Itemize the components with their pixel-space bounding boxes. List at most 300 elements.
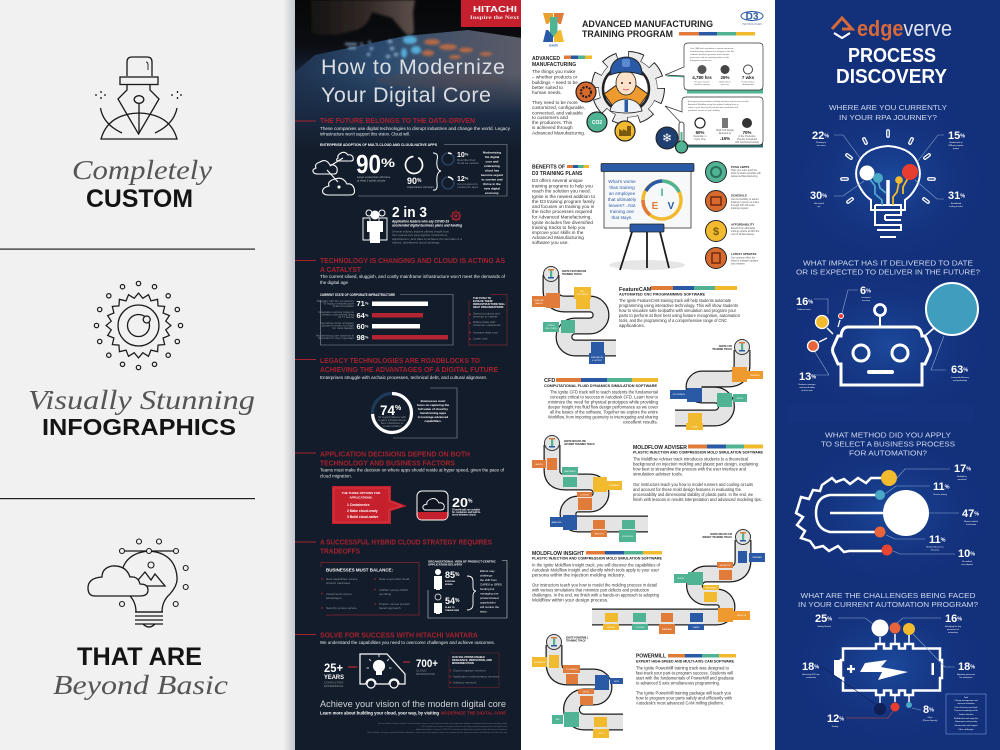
callout: molding results: Reduction in: [694, 135, 707, 138]
text: modernizing note: core and: [486, 160, 499, 164]
stat: 13 percent: to drive work: [801, 389, 813, 392]
text: cfd: The Ignite CFD track will to teach students the fundamental: [550, 390, 658, 394]
stat: 47 percent: %: [974, 512, 979, 518]
section: application decisions: [295, 450, 505, 478]
stat: 20 percent with cloud icon: [417, 491, 481, 520]
list: benefit badges: [706, 162, 761, 268]
stat: 20 percent with cloud icon: 20: [452, 495, 468, 510]
text: modernizing note: Modernizing: [483, 150, 501, 154]
track: moldflow insight: PREPARE: [752, 556, 762, 559]
callout: pressure to evolve: THE PUSH TO: [473, 296, 491, 300]
icon: virus: [450, 210, 462, 222]
text: board quote: that ultimately: [608, 197, 637, 202]
section: technology changing: the digital age: [320, 280, 348, 285]
question: challenges: [798, 591, 978, 609]
stat: 18 percent left: Achieving ROI from: [802, 673, 820, 676]
text: board quote: [608, 179, 637, 220]
icon: clouds: [313, 152, 354, 195]
item: schedule: training program: [731, 207, 748, 210]
icon: engineer figure: [604, 57, 648, 113]
stat: 15 percent: 15: [948, 130, 960, 142]
track: cfd: IGNITE CFD: [719, 346, 732, 348]
section: application decisions: cloud migration.: [320, 474, 352, 478]
text: moldflow insight: PLASTIC INJECTION AND COMPRESSION MOLD SIMULATION SOFTWARE: [532, 556, 663, 560]
item: push limits: limits of what's possible with: [731, 172, 761, 175]
stat: 2 in 3: [363, 204, 462, 244]
track: powermill: AXIS: [614, 680, 619, 683]
stat: 11 percent: Process mining: [933, 494, 947, 496]
callout: pressure to evolve: Increase data trust: [473, 330, 498, 334]
stat: 16 percent: 16: [796, 296, 808, 308]
footnotes: Hitachi Vantara, all rights reserved. All other trademarks, service marks and company names are properties of their respective owners and used here for reference only: [367, 731, 507, 734]
stat: 30 percent: Not started: [814, 202, 824, 205]
track: moldflow insight: INSIGHT TRAINING TRACK: [702, 536, 732, 539]
logo: ignite: IGNITE: [549, 44, 558, 48]
text: benefits of d3 training plans: training programs to help you: [532, 184, 593, 188]
stat: 16 percent: Identifying the key: [945, 625, 961, 628]
text: benefits of d3 training plans: and focuses on training you in: [532, 204, 595, 209]
donut chart: 74 percent: %: [395, 405, 402, 412]
track: powermill: INTERFACE: [534, 661, 546, 664]
track: moldflow insight: COOLING: [635, 627, 645, 629]
callout: software benefits: manufacturing software for designers that lets: [690, 50, 735, 53]
bar chart: corporate infrastructure: limits innovation: [333, 304, 354, 308]
chart box: enterprise adoption: [313, 143, 507, 196]
section: application decisions: TECHNOLOGY AND BUSINESS FACTORS: [320, 458, 455, 468]
stat: 20 percent with cloud icon: Of workloads are suitable: [452, 508, 481, 512]
stats: 10 and 12 percent: 10: [457, 152, 465, 159]
logo: d3 technologies: TECHNOLOGIES: [742, 23, 762, 26]
text: featurecam: The Ignite FeatureCAM training track will help students automate: [619, 298, 731, 303]
callout: molding results: of the Production: [738, 135, 756, 138]
stat: 63 percent: [951, 364, 969, 382]
panel: product-centric delivery: PLAN TO: [445, 606, 455, 609]
callout: pressure to evolve: EVOLVE THEIR: [473, 299, 493, 303]
stat: 31 percent: %: [960, 194, 965, 200]
leader lines: [818, 618, 955, 718]
track: powermill: TRAINING TRACK: [566, 640, 586, 642]
donut chart: 74 percent: capabilities.: [424, 419, 442, 423]
stat: 25 percent: Getting Started: [817, 625, 831, 628]
panel: businesses must balance: advantages: [326, 596, 342, 600]
section: solve for success: [295, 630, 495, 645]
stat: 11 percent automated: Automated process: [926, 546, 944, 548]
leader lines: [811, 290, 946, 375]
text: moldflow adviser: MOLDFLOW ADVISER: [633, 445, 687, 451]
track: moldflow insight: MODEL: [677, 578, 685, 580]
track: moldflow insight: WARPAGE: [662, 628, 673, 631]
stat: 2 in 3: their experiences tying together infrastructure,: [392, 233, 448, 237]
heading: visually stunning infographics: Visually Stunning: [28, 385, 255, 415]
bar chart: corporate infrastructure: for most leaders: [332, 326, 354, 330]
donut chart: 74 percent: Of organizations with: [378, 415, 406, 419]
callout: pressure to evolve: customer experience: [473, 323, 501, 327]
footnotes: [367, 722, 507, 734]
icon: yellow factory badge: [615, 121, 635, 141]
text: cfd: COMPUTATIONAL FLUID DYNAMICS SIMULATION SOFTWARE: [544, 384, 658, 388]
callout: molding results: 60%: [696, 130, 704, 135]
stat: 90 percent: 90: [356, 149, 381, 179]
stat: 25 percent: 25: [815, 613, 827, 625]
callout: software benefits: Make-time in: [719, 80, 731, 84]
track: moldflow insight: IGNITE MOLDFLOW: [710, 534, 733, 536]
stat: 16 percent: automation: [948, 631, 958, 634]
text: advanced manufacturing intro: Advanced Manufacturing.: [532, 130, 585, 136]
track: cfd: TRAINING TRACK: [712, 348, 732, 351]
text: moldflow adviser: and account for these mold design features in evaluating the: [633, 487, 741, 492]
panel: hitachi digital core: [295, 0, 522, 750]
closing statement: Learn more about building your cloud, your way, by visiting: [320, 710, 439, 716]
callout: three options: 2 Make cloud-ready: [347, 509, 378, 513]
callout: software benefits: Faster product: [742, 80, 755, 84]
panel: product-centric delivery: funding but: [480, 587, 495, 591]
text: moldflow adviser: finish with lessons in results interpretation and advanced modeling tips.: [633, 497, 762, 502]
stat: 2 in 3: accelerated digital business plans and funding: [392, 224, 462, 228]
callout: pressure to evolve: HELP ORGANIZATIONS:: [473, 305, 504, 309]
track: powermill: [532, 634, 623, 738]
stat: 31 percent: [948, 190, 965, 208]
panel: businesses must balance: Project- versus product: [379, 602, 410, 606]
callout: molding results: 70%: [743, 130, 751, 135]
track: moldflow insight: DESIGN: [607, 627, 615, 629]
donut chart: 74 percent: full value of cloud by: [418, 407, 448, 411]
text: powermill: The Ignite PowerMill training package will teach you: [636, 690, 731, 696]
heading: that are beyond basic: Beyond Basic: [53, 670, 228, 700]
text: advanced manufacturing intro: MANUFACTURING: [532, 62, 576, 68]
panel: product-centric delivery: MODEL: [445, 584, 454, 586]
text: featurecam: [619, 286, 740, 328]
text: moldflow insight: MOLDFLOW INSIGHT: [532, 551, 585, 557]
stat: 90 percent: %: [381, 156, 395, 170]
section: legacy technologies: Enterprises struggle with archaic processes, technical debt, and cultural alignment.: [320, 375, 487, 380]
track: moldflow adviser: BASICS: [535, 463, 543, 466]
bar chart: corporate infrastructure: of legacy infrastructure: [324, 302, 354, 306]
stats: 10 and 12 percent: Describe their: [457, 158, 476, 162]
text: board quote: an employee: [609, 191, 636, 196]
stat: 22 percent: %: [824, 134, 829, 140]
text: powermill: fast-track your part-to-program success. Students will: [636, 670, 733, 676]
text: modernizing note: embracing: [484, 164, 500, 168]
stat: 16 percent: [945, 613, 962, 634]
text: featurecam: AUTOMATED CNC PROGRAMMING SOFTWARE: [619, 292, 706, 296]
stat: 6 percent: 6: [860, 285, 866, 297]
note box: Skilled talent and expertise: [954, 717, 979, 720]
stat: 47 percent: Manual method: [964, 520, 978, 523]
section: hybrid cloud strategy: TRADEOFFS: [320, 546, 360, 556]
stat: 22 percent: [812, 130, 829, 147]
panel: product-centric delivery: ORGANIZATIONAL VIEW OF PRODUCT-CENTRIC: [428, 560, 497, 564]
donut: 90 percent: [402, 153, 434, 189]
panel: product-centric delivery: managing one: [480, 592, 499, 596]
stat: 18 percent right: for automation: [960, 676, 972, 679]
track: moldflow insight: [592, 530, 765, 634]
stats: 10 and 12 percent: [442, 152, 480, 189]
stat: 18 percent right: %: [970, 664, 975, 670]
callout: software benefits: throughout production.: [690, 59, 712, 62]
text: benefits of d3 training plans: the niche processes required: [532, 209, 593, 214]
callout: software benefits: development: [742, 83, 754, 86]
heading: completely custom: Completely: [72, 155, 212, 185]
track: moldflow adviser: ANALYSIS: [552, 521, 562, 524]
text: board quote: that stays.: [612, 215, 632, 220]
panel: product-centric delivery: will resolve the: [480, 605, 499, 609]
track: featurecam: [532, 266, 616, 364]
section: solve for success: We understand the capabilities you need to overcome challenges and achieve outcomes.: [320, 640, 495, 645]
text: modernizing note: become urgent: [481, 173, 503, 177]
note box: Total: [964, 696, 969, 699]
stat: 2 in 3: Application leaders who say COVID-19: [391, 220, 449, 224]
donut chart: 74 percent: transforming apps: [420, 411, 446, 415]
stat: 90 percent: Large enterprises will have: [357, 175, 391, 179]
text: powermill: Autodesk's most advanced CAM milling platform.: [636, 700, 724, 706]
stat: 15 percent: Started with an: [949, 141, 963, 144]
panel: businesses must balance: Data on-premise cloud: [379, 577, 410, 581]
callout: three options: [332, 486, 407, 524]
panel: edgeverve process discovery: [775, 0, 1000, 750]
track: powermill: POST: [598, 733, 604, 735]
callout: software benefits: 4,780 hrs: [692, 75, 712, 80]
stat: 30 percent: yet: [818, 205, 821, 208]
stat: 18 percent right: Migrating processes: [957, 673, 975, 676]
text: modernizing note: new digital: [484, 186, 500, 190]
track: featurecam: MILL: [580, 291, 586, 293]
callout: molding results: A company that provides molding solutions found success with: [688, 100, 749, 103]
panel: product-centric delivery: APPLICATION DELIVERY: [428, 562, 463, 566]
title: DISCOVERY: [836, 66, 948, 88]
callout: software benefits: 26%: [720, 75, 730, 80]
stat: 30 percent: %: [822, 194, 827, 200]
callout: software benefits: Per year saved in: [694, 82, 710, 84]
question: impact: WHAT IMPACT HAS IT DELIVERED TO DATE: [803, 258, 973, 268]
stat: 13 percent: %: [811, 374, 816, 380]
track: featurecam: FEATURE: [534, 299, 544, 302]
section: technology changing: A CATALYST: [320, 265, 361, 274]
section: technology changing: TECHNOLOGY IS CHANGING AND CLOUD IS ACTING AS: [320, 256, 505, 265]
panel: product-centric delivery: the shift from: [480, 578, 497, 582]
panel: businesses must balance: Investments versus: [326, 592, 352, 596]
bar chart: corporate infrastructure: 64: [356, 311, 365, 320]
text: board quote: What's worse: [608, 179, 636, 184]
stat: 18 percent left: %: [814, 664, 819, 670]
logo: edgeverve: edgeverve: [857, 16, 952, 41]
text: moldflow adviser: simulation adviser tools.: [633, 472, 683, 476]
track: powermill: SIM: [556, 719, 560, 721]
text: moldflow adviser: how best to streamline the process with the user interface and: [633, 466, 746, 472]
callout: molding results: Reduced by: [719, 133, 732, 135]
chart: lightbulb: [810, 130, 965, 237]
stat: 700 migrations: MIGRATIONS: [416, 672, 435, 676]
callout: vantara solutions: Application modernization services: [453, 674, 500, 678]
stat: 11 percent: 11: [933, 481, 945, 493]
text: modernizing note: cloud has: [485, 168, 499, 172]
panel: product-centric delivery: TRANSFORM: [445, 609, 459, 612]
footnotes: IDC and industry surveys on enterprise infrastructure, legacy modernization priorities and hybrid cloud: [422, 725, 507, 728]
item: affordability: [706, 220, 760, 242]
text: moldflow adviser: background on injection molding and plastic part design, explaining: [633, 462, 758, 466]
question: challenges: IN YOUR CURRENT AUTOMATION PROGRAM?: [798, 600, 978, 609]
panel: product-centric delivery: EXISTING: [445, 581, 456, 583]
stat: 6 percent: Increased: [862, 297, 870, 299]
callout: molding results: .15%: [720, 136, 730, 141]
bar chart: corporate infrastructure: creates operational drag: [322, 312, 354, 316]
panel: left intro: [0, 0, 296, 750]
bar chart: corporate infrastructure: Struggle with the complexity: [317, 299, 354, 303]
track: featurecam: & OUTPUT: [592, 360, 603, 362]
note box: Other challenges: [958, 728, 974, 731]
text: cfd: concepts critical to success in Autodesk CFD. Learn how to: [550, 394, 658, 400]
question: impact: OR IS EXPECTED TO DELIVER IN THE FUTURE?: [796, 268, 980, 276]
stat: 18 percent left: [802, 661, 820, 679]
icon: thermometer badge: ❄: [662, 131, 672, 145]
callout: three options: THE THREE OPTIONS FOR: [342, 491, 381, 495]
callout: three options: 3 Build cloud-native: [347, 515, 378, 519]
track: moldflow adviser: COOLING: [580, 494, 590, 496]
callout: software benefits: machine capacity: [694, 83, 710, 86]
stat: 25 years: 25+: [324, 661, 343, 675]
section: legacy technologies: LEGACY TECHNOLOGIES ARE ROADBLOCKS TO: [320, 356, 480, 365]
stats: 10 and 12 percent: Are prepared to: [457, 182, 478, 186]
stat: 18 percent right: 18: [958, 661, 970, 673]
donut chart: 74 percent: legacy infrastructure: [378, 418, 406, 422]
logo: hitachi: Inspire the Next: [470, 15, 519, 21]
text: featurecam: parts to perform at their best using feature recognition, automation: [619, 313, 740, 318]
text: powermill: to advanced 5 axis simultaneous programming.: [636, 680, 720, 686]
title: ADVANCED MANUFACTURING: [582, 19, 713, 29]
text: moldflow insight: Our instructors teach you how to model the molding process in detail: [532, 582, 657, 588]
text: powermill: EXPERT HIGH-SPEED AND MULTI-AXIS CAM SOFTWARE: [636, 660, 735, 664]
stat: 31 percent: scaling to value: [949, 205, 964, 208]
stat: 10 percent: was adopted: [961, 563, 973, 566]
stat: 63 percent: %: [963, 368, 968, 374]
stat: 47 percent: [962, 508, 979, 526]
stat: 90 percent: at least 2 public clouds: [357, 178, 386, 182]
donut chart: 74 percent: face obstacles to: [381, 421, 404, 425]
section: technology changing: [295, 256, 506, 285]
track: cfd: CFD DESIGN: [672, 394, 685, 396]
stats: 10 and 12 percent: modernize apps: [457, 185, 479, 189]
stat: 22 percent: start soon: [817, 144, 825, 147]
section: hybrid cloud strategy: [295, 538, 492, 556]
panel: businesses must balance: New capabilities versus: [326, 577, 358, 581]
callout: pressure to evolve: Speed products and: [473, 312, 500, 316]
title: [582, 19, 755, 39]
text: modernizing note: economy.: [485, 191, 499, 195]
text: benefits of d3 training plans: reach the solution you need.: [532, 188, 591, 194]
text: benefits of d3 training plans: the D3 training program family: [532, 199, 595, 204]
item: schedule: through D3's full-scale: [731, 204, 755, 207]
donut chart: 74 percent: to leverage advanced: [418, 415, 448, 419]
text: advanced manufacturing intro: ADVANCED: [532, 56, 560, 62]
stat: 22 percent: Planning to: [816, 141, 827, 144]
stat: 16 percent: processes for: [947, 629, 959, 631]
text: featurecam: programming using interactive technology. This will show students: [619, 303, 739, 308]
question: impact: [796, 258, 980, 276]
stat: 11 percent: %: [945, 484, 950, 490]
panel: businesses must balance: Security versus service: [326, 606, 357, 610]
callout: vantara solutions: MODERNIZATION: [452, 661, 474, 665]
stat: 10 percent: 10: [958, 548, 970, 560]
item: push limits: Advanced Manufacturing: [731, 175, 758, 178]
bar chart: corporate infrastructure: 98: [356, 333, 365, 342]
title: [836, 45, 948, 88]
text: advanced manufacturing intro: The things you make: [532, 69, 576, 74]
icon: truck with bulb: [348, 654, 410, 688]
donut chart: 74 percent: Businesses must: [421, 399, 445, 403]
stat: 6 percent: accuracy: [862, 300, 870, 302]
stat: 13 percent: 13: [799, 371, 811, 383]
text: featurecam: how to visualize safe toolpaths with simulation and program your: [619, 308, 736, 313]
callout: molding results: Cycle Time: [694, 139, 706, 141]
callout: software benefits: [665, 43, 763, 94]
section: future belongs to data-driven: infrastructure won't support this vision. Cloud will.: [320, 132, 410, 136]
stat: 6 percent: [860, 285, 871, 302]
text: powermill: POWERMILL: [636, 654, 667, 660]
chart: gear: [796, 463, 979, 566]
stat: 2 in 3: applications, and data to achieve the benefits of a: [392, 237, 462, 241]
icon: iev ring: [643, 181, 681, 219]
callout: software benefits: students develop, generate and simulate: [690, 53, 730, 56]
section: technology changing: The current siloed, sluggish, and costly mainframe infrastructure won't meet the demands of: [320, 274, 506, 279]
donut: 90 percent: 90: [407, 176, 417, 186]
stat: 17 percent: [954, 463, 971, 481]
stat: 20 percent with cloud icon: %: [468, 498, 473, 504]
text: advanced manufacturing intro: connected, and valuable: [532, 110, 583, 116]
stat: 11 percent automated: discovery: [931, 550, 939, 552]
item: affordability: cost of similar classes: [731, 233, 755, 236]
icon: iev ring: E: [652, 201, 659, 212]
text: benefits of d3 training plans: D3 offers several unique: [532, 178, 583, 183]
text: modernizing note: thrive in the: [483, 182, 501, 186]
stat: 12 percent: %: [839, 716, 844, 722]
callout: vantara solutions: [449, 653, 500, 688]
callout: pressure to evolve: INFRASTRUCTURE WILL: [473, 302, 505, 306]
logo: hitachi: HITACHI: [473, 5, 517, 14]
text: benefits of d3 training plans: D3 TRAINING PLANS: [532, 171, 583, 177]
heading: visually stunning infographics: INFOGRAPHICS: [42, 414, 236, 440]
bar chart: corporate infrastructure: Integration across systems: [318, 310, 354, 314]
item: schedule: SCHEDULE: [731, 194, 747, 198]
bar chart: corporate infrastructure: 60: [356, 322, 365, 331]
item: push limits: [706, 162, 761, 182]
note box: [946, 694, 986, 734]
heading: completely custom: CUSTOM: [86, 185, 193, 213]
track: moldflow insight: MATERIALS: [705, 586, 717, 590]
question: method: TO SELECT A BUSINESS PROCESS: [821, 440, 955, 448]
bar chart: corporate infrastructure: %: [365, 334, 369, 340]
text: advanced manufacturing intro: buildings – need to be: [532, 80, 578, 85]
stat: 25 years: CONSULTING: [324, 680, 344, 684]
panel: businesses must balance: BUSINESSES MUST BALANCE:: [326, 568, 393, 572]
icon: iev ring: V: [668, 201, 675, 212]
track: powermill: SETUP: [583, 692, 590, 694]
text: moldflow insight: In the Ignite Moldflow Insight track, you will discover the capabilities of: [532, 562, 661, 568]
panel: product-centric delivery: %: [455, 598, 460, 604]
callout: molding results: predictive results on part stability.: [688, 109, 721, 112]
stat: 11 percent: [933, 481, 950, 496]
text: cfd: all the basics of the software. Together we explore the entire: [550, 410, 658, 414]
text: benefits of d3 training plans: training tracks to help you: [532, 225, 586, 230]
stat: 13 percent: [799, 371, 816, 392]
donut chart: 74 percent: 74: [380, 402, 395, 418]
section: solve for success: SOLVE FOR SUCCESS WITH HITACHI VANTARA: [320, 630, 478, 640]
stat: 11 percent automated: 11: [929, 534, 941, 546]
callout: software benefits: Use CAM and simulation to speed advanced: [690, 47, 734, 50]
text: powermill: start with the fundamentals of PowerMill and graduate: [636, 676, 734, 680]
stat: 8 percent: Other: [927, 716, 933, 719]
stat: 31 percent: 31: [948, 190, 960, 202]
panel: product-centric delivery: 85: [445, 570, 455, 580]
bar chart: corporate infrastructure: important or very important: [318, 336, 354, 340]
